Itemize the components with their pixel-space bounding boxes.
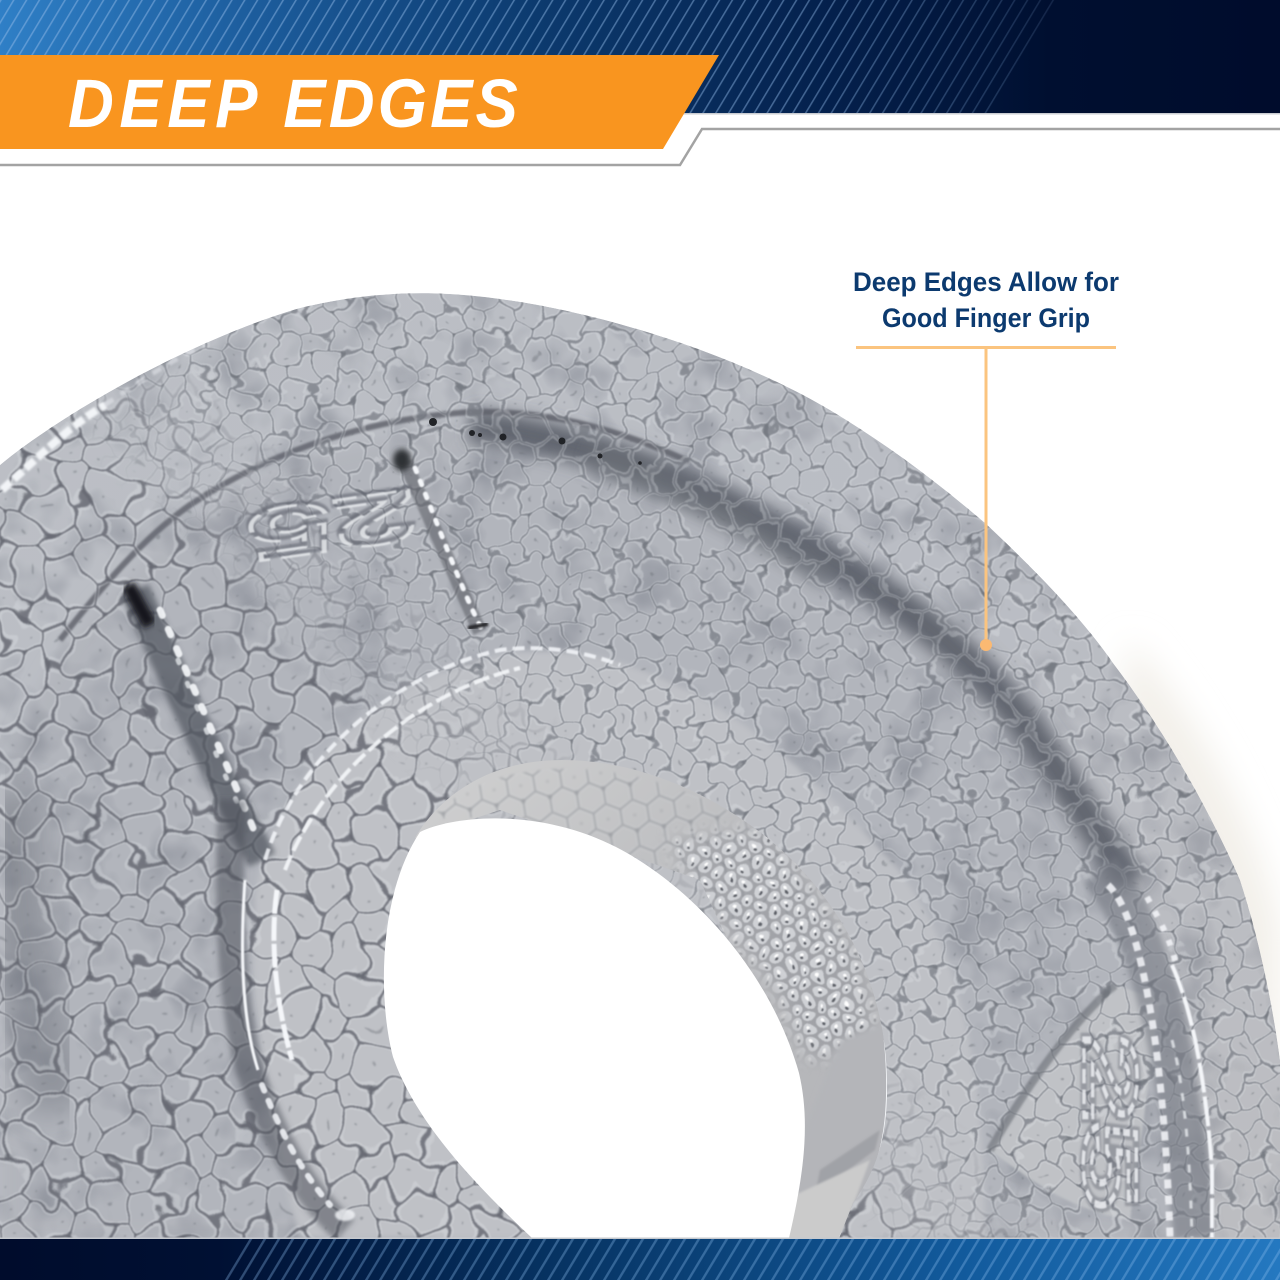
header underline <box>680 113 1280 114</box>
orange title banner <box>0 55 719 149</box>
title: EDGES <box>283 66 518 143</box>
embossed 25 upper left: 25 <box>242 474 422 576</box>
bore fine texture <box>430 769 860 960</box>
left rib <box>128 585 262 860</box>
footer stripes <box>215 1238 1280 1280</box>
tonal mottling <box>0 290 1280 1240</box>
callout leader line <box>984 348 988 644</box>
bore streak <box>818 1131 880 1184</box>
recessed face shading <box>0 432 1205 1238</box>
rim groove shadow <box>60 412 1130 885</box>
bore wall <box>400 750 900 1240</box>
callout dot <box>980 639 992 651</box>
embossed 25 lower right: 25 <box>1067 1034 1152 1210</box>
header white gap <box>682 114 1280 128</box>
bore bubble texture <box>672 826 877 1064</box>
callout text: Deep Edges Allow for <box>853 267 1119 297</box>
bore flat lower section <box>836 1028 878 1214</box>
footer top line <box>0 1238 1280 1239</box>
embossed 25 upper left: 25 <box>242 471 421 573</box>
embossed 25 upper left <box>246 484 416 563</box>
embossed 25 lower right: 25 <box>1067 1034 1152 1210</box>
rim pitting specks <box>429 418 642 465</box>
bore base <box>416 760 881 1214</box>
callout text <box>853 267 1119 333</box>
cast iron cell texture, small cells <box>78 293 1280 1238</box>
callout text: Good Finger Grip <box>882 303 1090 333</box>
header band <box>0 0 1280 165</box>
callout <box>853 267 1119 651</box>
hub raised boss <box>253 651 985 1238</box>
hole <box>384 818 805 1238</box>
title <box>68 66 518 143</box>
bore edge highlight <box>840 1040 887 1238</box>
header stripes <box>0 0 1060 113</box>
right triangle edge <box>990 985 1115 1150</box>
footer band <box>0 1238 1280 1280</box>
bore lower light band <box>780 1160 870 1240</box>
top rim highlight <box>2 345 205 490</box>
title: DEEP <box>68 66 258 143</box>
cast iron cell texture, large cells <box>0 373 1035 1238</box>
callout horizontal rule <box>856 346 1116 349</box>
header frame line <box>0 129 1280 165</box>
upper rib <box>393 449 488 632</box>
hub highlights <box>230 648 620 1230</box>
soft shadow behind plate <box>1120 640 1280 1100</box>
header gradient <box>0 0 1280 113</box>
right rim groove with beaded edge <box>1100 870 1212 1238</box>
plate base <box>0 293 1280 1238</box>
embossed 25 lower right <box>1079 1032 1142 1213</box>
footer gradient <box>0 1238 1280 1280</box>
right triangular recess <box>990 985 1160 1220</box>
